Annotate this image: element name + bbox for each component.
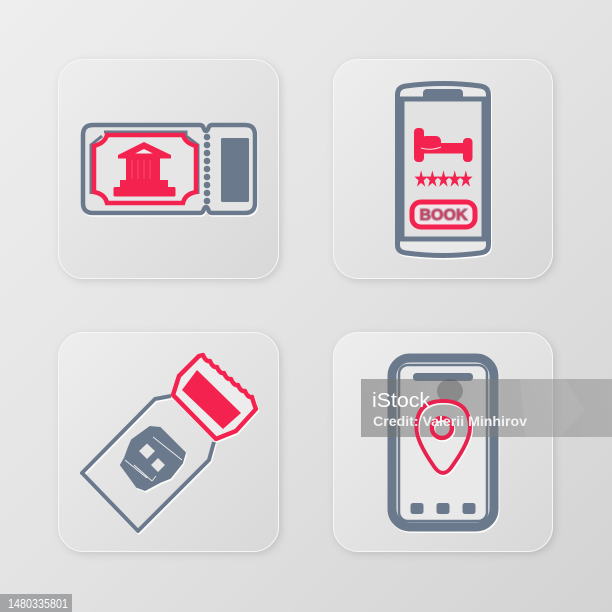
phone side bars: [400, 99, 486, 239]
stub block: [182, 370, 241, 429]
ticket frame: [94, 135, 196, 203]
frame shadow: [91, 132, 198, 194]
pediment and column details: [132, 149, 153, 179]
home buttons: [410, 503, 476, 514]
book button: [412, 202, 475, 227]
band: [361, 379, 612, 437]
icon: torn ticket: [82, 355, 256, 531]
phone screen: [402, 99, 484, 239]
rating stars: ★★★★★: [416, 172, 472, 188]
bus body: [121, 427, 185, 490]
watermark text: [372, 389, 527, 429]
bus windows: [139, 444, 165, 472]
band facets: [520, 379, 585, 437]
panel: bus ticket: [58, 332, 278, 552]
phone inner: [399, 365, 487, 521]
stub block: [221, 138, 249, 202]
phone outer: [392, 358, 494, 527]
panel: hotel booking phone: [334, 60, 552, 278]
phone body: [398, 84, 488, 256]
speaker: [413, 373, 473, 381]
panel card: [334, 332, 552, 552]
bed pillow line: [421, 147, 441, 149]
icon: ticket: [83, 125, 255, 213]
watermark band: [361, 379, 612, 437]
ticket body: [82, 396, 214, 531]
icon: bed: [414, 128, 472, 162]
pin outline: [416, 401, 470, 473]
panel card: [334, 60, 552, 278]
panel: map pin phone: [334, 332, 612, 552]
panel card: [58, 60, 278, 278]
icon: museum building: [114, 142, 176, 196]
icon: bus: [121, 427, 185, 490]
ticket outline: [83, 125, 255, 213]
phone notch: [423, 89, 463, 101]
band silhouette: [437, 379, 463, 403]
pin centre: [432, 418, 452, 438]
bus trim lines: [125, 437, 182, 481]
ticket stub: [173, 355, 256, 439]
book label: BOOK: [420, 207, 468, 224]
image id badge: [0, 594, 72, 612]
panel: museum ticket: [58, 60, 278, 278]
perforation: [204, 134, 210, 204]
icon: phone: [398, 84, 488, 256]
watermark credit: Credit: Valerii Minhirov: [373, 413, 527, 429]
icon: smartphone: [392, 358, 494, 527]
watermark logo: iStock: [372, 389, 431, 412]
badge box: [0, 594, 72, 612]
badge number: 1480335801: [8, 597, 68, 611]
panel card: [58, 332, 278, 552]
icon: map pin: [416, 401, 470, 473]
